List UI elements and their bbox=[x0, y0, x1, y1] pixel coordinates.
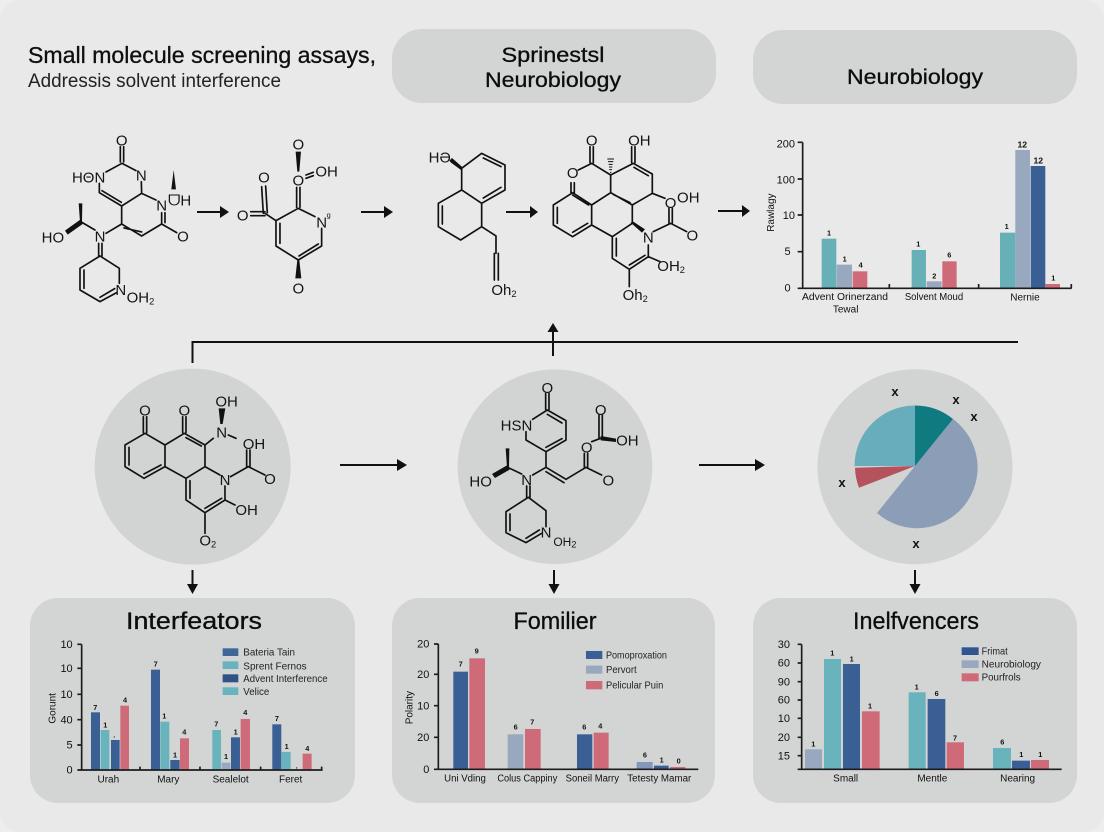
bar chart: 1 bbox=[915, 683, 919, 692]
bar chart: 6 bbox=[582, 723, 586, 732]
molecule 3: Oh bbox=[491, 282, 511, 299]
circle: molecule 6: O bbox=[595, 402, 606, 419]
bar chart: 6 bbox=[1000, 737, 1004, 746]
bar chart: 20 bbox=[417, 669, 429, 681]
bar chart bbox=[48, 639, 323, 786]
marks: x bbox=[912, 536, 920, 551]
bar chart: Tetesty Mamar bbox=[627, 774, 692, 785]
molecule 3: HƏ bbox=[429, 149, 451, 166]
bar chart: 60 bbox=[778, 658, 790, 670]
circle: molecule 5: O bbox=[199, 533, 211, 550]
axis labels: 5 bbox=[785, 246, 791, 258]
bar chart: . bbox=[296, 761, 298, 770]
molecule 2 bbox=[237, 136, 338, 298]
molecule 4: OH bbox=[657, 258, 680, 275]
bar chart: 1 bbox=[103, 721, 107, 730]
arrow bbox=[197, 206, 229, 218]
bars bbox=[822, 150, 1060, 288]
bar chart: Gorunt bbox=[48, 693, 59, 724]
bar chart: 60 bbox=[778, 695, 790, 707]
marks: x bbox=[838, 475, 846, 490]
molecule 4: Oh bbox=[623, 287, 643, 304]
molecule 2: N bbox=[316, 214, 327, 231]
bar chart: 6 bbox=[643, 750, 647, 759]
bar chart: 20 bbox=[778, 732, 790, 744]
bar chart: Colus Cappiny bbox=[497, 774, 557, 785]
bar chart: 4 bbox=[305, 744, 310, 753]
slice: slate bbox=[877, 419, 978, 528]
header pill: Sprinestsl Neurobiology: Sprinestsl bbox=[502, 44, 604, 67]
molecule 4: OH bbox=[677, 190, 700, 207]
value labels: 1 bbox=[843, 254, 847, 263]
circle: pie chart bbox=[818, 369, 1012, 564]
circle: molecule 5: O bbox=[264, 471, 276, 488]
arrow bbox=[361, 206, 393, 218]
bar chart: 1 bbox=[173, 751, 177, 760]
bar chart: Mary bbox=[157, 775, 179, 786]
value labels: 4 bbox=[859, 261, 864, 270]
bar chart: Soneil Marry bbox=[566, 774, 619, 785]
bar chart: Polarity bbox=[405, 691, 416, 724]
axis labels: 100 bbox=[777, 174, 795, 186]
panel: Fomilier bbox=[392, 598, 715, 803]
bar chart: 20 bbox=[417, 639, 429, 651]
bar chart: 4 bbox=[598, 722, 603, 731]
bar chart: 7 bbox=[154, 660, 158, 669]
title: Small molecule screening assays, bbox=[28, 42, 376, 68]
value labels: 1 bbox=[1051, 274, 1055, 283]
bar chart: 4 bbox=[243, 708, 248, 717]
molecule 1: N bbox=[156, 198, 167, 215]
circle: molecule 6: HSN bbox=[501, 418, 532, 435]
panel: Inelfvencers bbox=[753, 598, 1077, 803]
bar chart: 7 bbox=[93, 703, 97, 712]
bar chart bbox=[778, 639, 1062, 785]
circle: molecule 5: OH bbox=[215, 393, 238, 410]
axis labels bbox=[766, 139, 1040, 316]
value labels: 1 bbox=[1005, 222, 1009, 231]
bar chart: 1 bbox=[285, 742, 289, 751]
legend bbox=[223, 648, 328, 698]
title block bbox=[28, 42, 376, 92]
slice: red bbox=[855, 466, 915, 488]
molecule 2: g bbox=[327, 210, 331, 219]
legend: Frimat bbox=[982, 647, 1008, 658]
arrow bbox=[718, 205, 750, 217]
bar chart: top bbox=[766, 139, 1072, 316]
molecule 2: O bbox=[292, 172, 304, 189]
bar chart: 1 bbox=[660, 756, 664, 765]
axis labels: 10 bbox=[783, 210, 795, 222]
molecule 4: OH bbox=[628, 132, 651, 149]
bar chart: 5 bbox=[67, 740, 73, 752]
axis labels: Rawlagy bbox=[766, 194, 777, 232]
bar chart: 10 bbox=[60, 663, 73, 675]
axis labels: Solvent Moud bbox=[905, 292, 963, 303]
bar chart: Feret bbox=[279, 775, 303, 786]
legend: Velice bbox=[243, 687, 269, 698]
circle: molecule 5: N bbox=[216, 424, 227, 441]
molecule 1: N bbox=[136, 168, 147, 185]
bar chart: Urah bbox=[97, 775, 119, 786]
molecule 1 bbox=[42, 133, 191, 307]
marks: x bbox=[891, 384, 899, 399]
bar chart: Mentle bbox=[917, 774, 948, 785]
bar chart: 1 bbox=[224, 752, 228, 761]
molecule 1: O bbox=[177, 228, 189, 245]
molecule 1: ᗜH bbox=[168, 192, 191, 209]
molecule 1: HO bbox=[42, 229, 64, 246]
bar chart: 9 bbox=[475, 647, 479, 656]
bar chart: 0 bbox=[67, 765, 73, 777]
header pill: Neurobiology: Neurobiology bbox=[847, 66, 984, 89]
bar chart: 7 bbox=[214, 720, 218, 729]
bar chart: 10 bbox=[60, 689, 73, 701]
bar chart: Uni Vding bbox=[444, 774, 486, 785]
bar chart: . bbox=[113, 731, 115, 740]
value labels: 2 bbox=[932, 271, 936, 280]
circle: molecule 6 bbox=[458, 369, 652, 564]
legend: Pervort bbox=[606, 665, 637, 676]
molecule 1: N bbox=[95, 228, 105, 245]
arrow bbox=[340, 459, 407, 471]
legend: Pelicular Puin bbox=[606, 680, 663, 691]
bar chart: 1 bbox=[850, 654, 854, 663]
subtitle: Addressis solvent interference bbox=[28, 71, 281, 92]
circle: molecule 6: N bbox=[541, 524, 551, 541]
marks: x bbox=[970, 409, 978, 424]
heading: Fomilier bbox=[514, 608, 596, 635]
bar chart: 1 bbox=[830, 648, 834, 657]
connector line with up arrow bbox=[192, 323, 1018, 363]
circle: molecule 5 bbox=[95, 369, 291, 565]
slice: light teal bbox=[854, 406, 915, 466]
axis labels: 200 bbox=[777, 139, 795, 151]
axis labels: Tewal bbox=[833, 305, 858, 316]
value labels: 1 bbox=[916, 240, 920, 249]
molecule 1: N bbox=[115, 282, 126, 299]
axes bbox=[798, 142, 1072, 288]
panel: Interfeators bbox=[30, 598, 355, 803]
bar chart: Small bbox=[833, 774, 858, 785]
bar chart: 15 bbox=[778, 750, 790, 762]
molecule 1: OH bbox=[127, 290, 149, 307]
arrow bbox=[699, 459, 765, 471]
molecule 1: O bbox=[116, 133, 127, 150]
molecule 4: O bbox=[567, 165, 578, 182]
molecule 2: O bbox=[237, 207, 248, 224]
legend: Advent Interference bbox=[243, 674, 328, 685]
legend: Pomoproxation bbox=[606, 650, 667, 661]
heading: Inelfvencers bbox=[853, 608, 979, 635]
header pill: Sprinestsl Neurobiology bbox=[392, 29, 716, 103]
bar chart: 10 bbox=[417, 700, 429, 712]
bar chart: 1 bbox=[162, 711, 166, 720]
axis labels: Nernie bbox=[1010, 293, 1040, 304]
molecule 4: 2 bbox=[643, 294, 648, 304]
molecule 4: O bbox=[686, 227, 698, 244]
molecule 4 bbox=[553, 132, 700, 304]
circle: molecule 6: O bbox=[581, 440, 592, 457]
bar chart: 40 bbox=[60, 714, 73, 726]
bar chart: 30 bbox=[778, 639, 790, 651]
bar chart: 1 bbox=[1019, 750, 1023, 759]
circle: molecule 6: O bbox=[602, 472, 614, 489]
marks bbox=[838, 384, 978, 551]
bar chart: 7 bbox=[459, 660, 463, 669]
molecule 1: 2 bbox=[149, 297, 154, 307]
circle: molecule 6: N bbox=[521, 472, 532, 489]
circle: molecule 5: N bbox=[220, 472, 230, 489]
circle: molecule 5: OH bbox=[243, 436, 265, 453]
legend: Bateria Tain bbox=[243, 648, 295, 659]
molecule 4: O bbox=[665, 195, 676, 212]
molecule 3 bbox=[429, 149, 517, 299]
legend: Pourfrols bbox=[982, 673, 1021, 684]
bar chart: 1 bbox=[811, 740, 815, 749]
slice: dark teal bbox=[915, 406, 953, 466]
value labels: 12 bbox=[1017, 140, 1027, 150]
legend: Neurobiology bbox=[982, 660, 1041, 671]
heading: Interfeators bbox=[126, 608, 262, 635]
marks: x bbox=[952, 392, 960, 407]
circle: molecule 5: O bbox=[139, 403, 151, 420]
bar chart bbox=[405, 639, 698, 785]
bar chart: 10 bbox=[60, 639, 73, 651]
bar chart: 0 bbox=[423, 764, 429, 776]
bar chart: Nearing bbox=[1000, 774, 1035, 785]
circle: molecule 6: 2 bbox=[571, 540, 577, 550]
circle: molecule 6: O bbox=[541, 380, 553, 397]
bar chart: 4 bbox=[123, 695, 128, 704]
molecule 4: 2 bbox=[680, 265, 685, 275]
circle: molecule 5: OH bbox=[235, 502, 258, 519]
bar chart: 1 bbox=[868, 701, 872, 710]
circle: molecule 6: HO bbox=[469, 473, 492, 490]
bar chart: 4 bbox=[182, 727, 187, 736]
circle: molecule 5: O bbox=[178, 403, 190, 420]
molecule 4: O bbox=[586, 132, 597, 149]
arrow bbox=[548, 570, 560, 594]
circle: molecule 6: OH bbox=[616, 433, 639, 450]
bar chart: 1 bbox=[234, 727, 238, 736]
molecule 2: OH bbox=[315, 164, 338, 181]
value labels bbox=[827, 140, 1055, 283]
arrow bbox=[506, 206, 538, 218]
value labels: 1 bbox=[827, 229, 831, 238]
bar chart: 7 bbox=[953, 734, 957, 743]
molecule 2: O bbox=[258, 169, 270, 186]
bar chart: 10 bbox=[778, 713, 790, 725]
bar chart: Sealelot bbox=[213, 775, 249, 786]
bar chart: 7 bbox=[275, 714, 279, 723]
value labels: 12 bbox=[1033, 155, 1043, 165]
bar chart: 20 bbox=[417, 732, 429, 744]
value labels: 6 bbox=[947, 250, 951, 259]
header pill: Neurobiology bbox=[753, 30, 1077, 104]
bar chart: 90 bbox=[778, 676, 790, 688]
molecule 3: 2 bbox=[511, 289, 517, 299]
arrow bbox=[910, 570, 920, 594]
header pill: Sprinestsl Neurobiology: Neurobiology bbox=[485, 69, 622, 92]
circle: molecule 6: OH bbox=[553, 535, 571, 549]
circle: molecule 5: 2 bbox=[211, 540, 216, 550]
legend: Sprent Fernos bbox=[243, 661, 307, 672]
molecule 2: O bbox=[292, 281, 304, 298]
bar chart: 1 bbox=[1038, 750, 1042, 759]
bar chart: 6 bbox=[935, 689, 939, 698]
bar chart: 7 bbox=[530, 717, 534, 726]
molecule 2: O bbox=[292, 136, 304, 153]
bar chart: 0 bbox=[677, 757, 681, 766]
bar chart: 6 bbox=[514, 723, 518, 732]
arrow bbox=[187, 570, 198, 594]
molecule 4: N bbox=[643, 230, 654, 247]
axis labels: Advent Orinerzand bbox=[802, 292, 888, 303]
legend bbox=[586, 650, 667, 691]
molecule 1: HΘN bbox=[72, 170, 105, 187]
legend bbox=[962, 647, 1041, 684]
axis labels: 0 bbox=[785, 283, 791, 295]
